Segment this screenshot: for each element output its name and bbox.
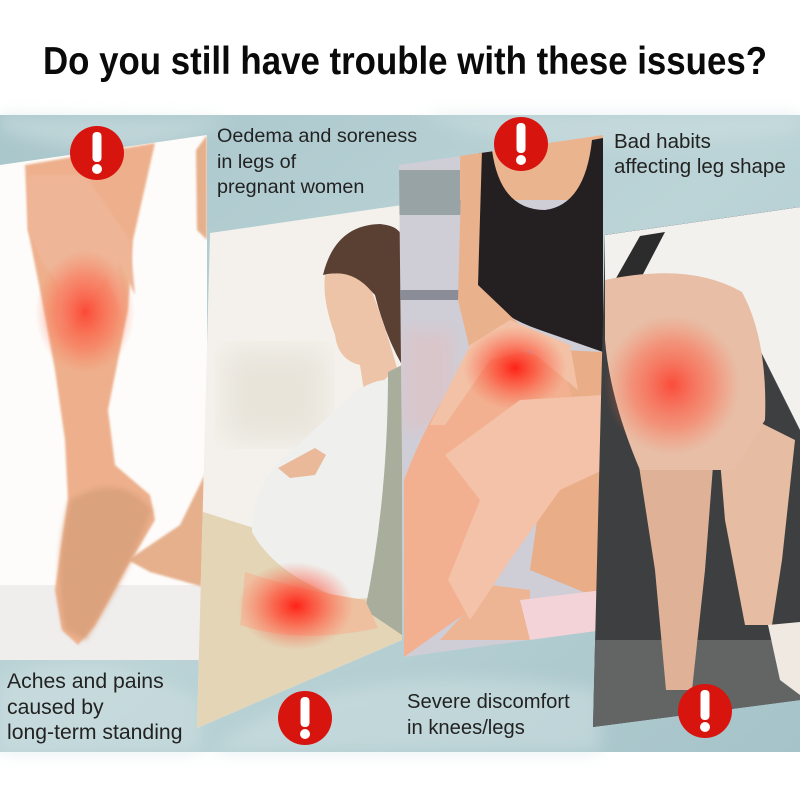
head and hair bbox=[323, 224, 402, 365]
caption: pregnant women: in legs of bbox=[217, 151, 297, 173]
panel: crossed legs photo bbox=[593, 205, 800, 730]
black top bbox=[478, 138, 603, 352]
caption: pregnant women: pregnant women bbox=[217, 176, 364, 198]
sandal bbox=[768, 622, 800, 695]
hand bbox=[26, 176, 136, 294]
main leg bbox=[25, 143, 155, 645]
pain glow: knee bbox=[606, 321, 734, 450]
pain glow: knee bbox=[466, 329, 564, 406]
pain glow: calf bbox=[37, 256, 133, 368]
thighs and knee bbox=[605, 273, 765, 470]
lower legs bbox=[639, 468, 713, 690]
foot bbox=[440, 585, 530, 640]
caption: long-term standing: long-term standing bbox=[7, 721, 182, 744]
caption: bad habits: Bad habits bbox=[614, 130, 711, 153]
upper hand bbox=[430, 320, 578, 425]
pink cloth bbox=[520, 590, 603, 640]
grey cardigan bbox=[365, 365, 402, 635]
warning icon 4 bbox=[678, 684, 732, 738]
panel: long-term standing photo bbox=[0, 130, 210, 665]
warning icon 1 bbox=[70, 126, 124, 180]
warning icon 2 bbox=[278, 691, 332, 745]
face and neck bbox=[324, 273, 397, 398]
white top and belly bbox=[252, 380, 384, 599]
thigh bbox=[240, 572, 378, 636]
second leg bbox=[128, 135, 207, 588]
warning icon 3 bbox=[494, 117, 548, 171]
caption: knees and legs: Severe discomfort bbox=[407, 691, 570, 713]
panel: knee pain photo bbox=[399, 135, 604, 660]
caption: pregnant women: Oedema and soreness bbox=[217, 125, 417, 147]
caption: knees and legs: in knees/legs bbox=[407, 717, 525, 739]
hand on belly bbox=[278, 448, 326, 478]
chest skin bbox=[460, 135, 603, 200]
foot sole bbox=[60, 487, 152, 640]
panel: pregnant woman photo bbox=[195, 205, 405, 730]
arm bbox=[458, 150, 520, 350]
teal background panel bbox=[0, 115, 800, 752]
thigh and knee bbox=[404, 345, 580, 657]
white skirt bbox=[605, 207, 800, 430]
caption: long-term standing: Aches and pains bbox=[7, 670, 164, 693]
body lower bbox=[530, 350, 603, 600]
caption: long-term standing: caused by bbox=[7, 696, 104, 719]
caption: bad habits: affecting leg shape bbox=[614, 155, 786, 178]
lower hand and forearm bbox=[445, 395, 603, 620]
pain glow: thigh bbox=[242, 564, 350, 648]
